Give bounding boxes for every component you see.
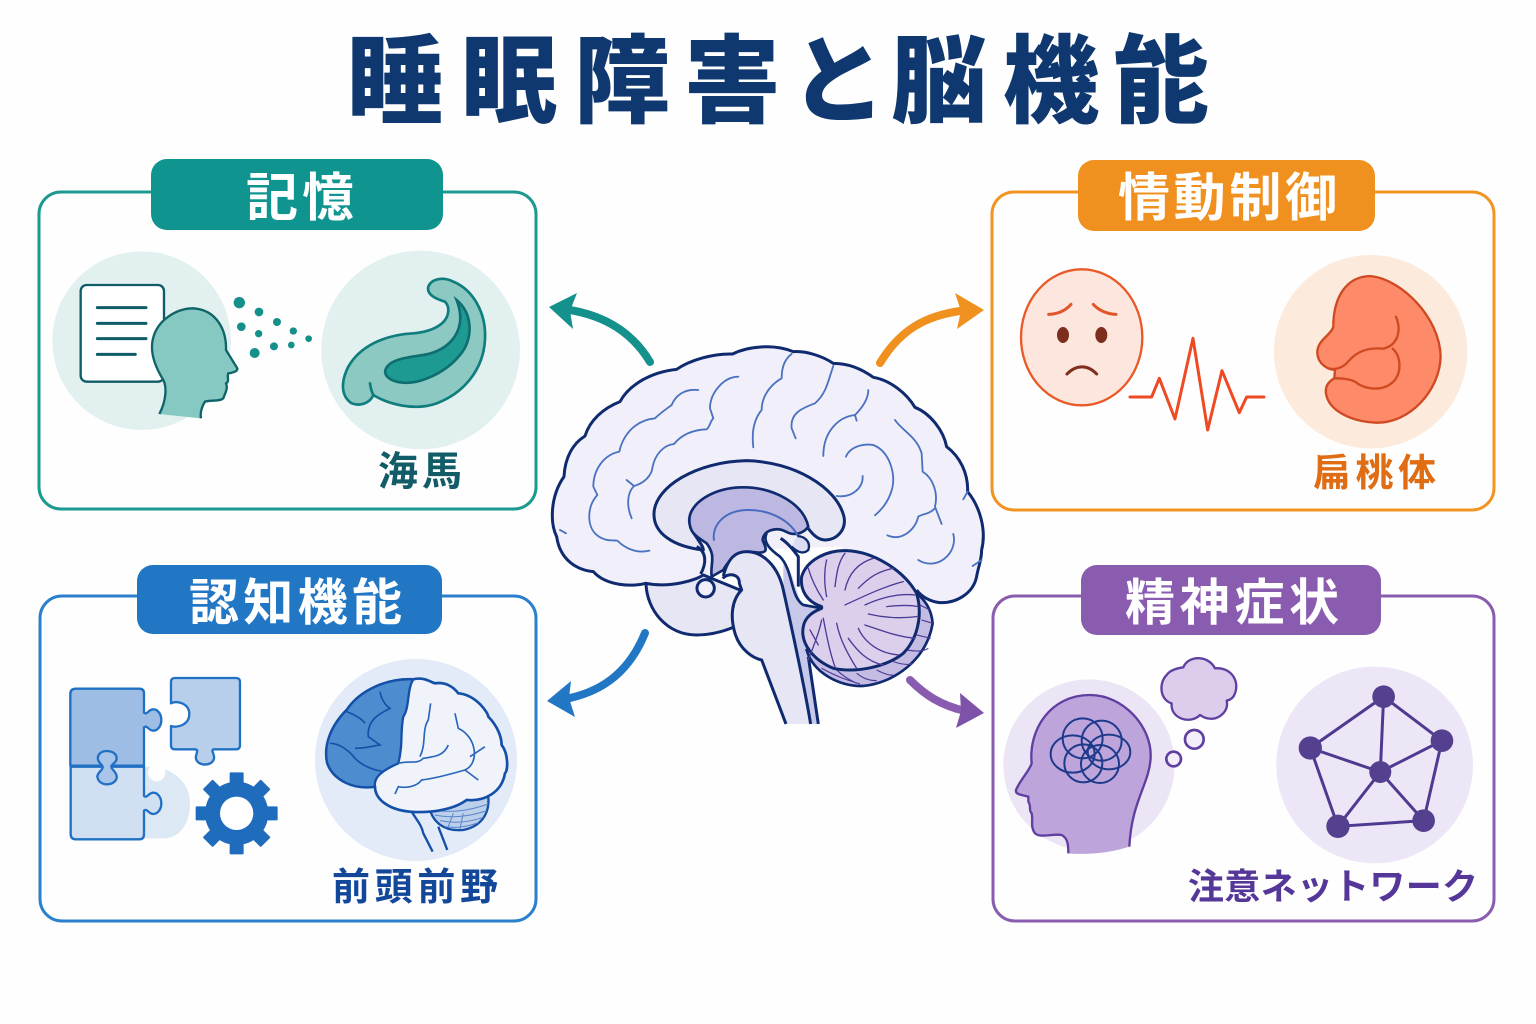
- icon: hippocampus: [321, 251, 520, 449]
- brain stem: [723, 552, 811, 724]
- label: prefrontal cortex: 前頭前野: [332, 867, 498, 909]
- heading tab: psychiatric symptoms: [1081, 565, 1381, 635]
- icon: pulse line: [1130, 338, 1264, 430]
- icon: amygdala: [1274, 255, 1467, 448]
- cerebellum: [801, 551, 933, 686]
- label: attention network: 注意ネットワーク: [1188, 866, 1478, 907]
- icon: gear: [196, 772, 278, 854]
- label: hippocampus: 海馬: [378, 450, 462, 494]
- heading tab: cognitive function: 認知機能: [189, 575, 402, 631]
- icon: head with tangled thoughts: [1003, 679, 1175, 854]
- panel: emotion regulation: [992, 160, 1494, 510]
- temporal lobe: [646, 575, 740, 635]
- corpus callosum: [654, 461, 844, 550]
- heading tab: psychiatric symptoms: 精神症状: [1125, 575, 1339, 631]
- panel: psychiatric symptoms: [993, 565, 1494, 921]
- arrow: to emotion regulation: [880, 293, 984, 363]
- panel: memory: [39, 159, 536, 509]
- central brain illustration: [552, 347, 983, 724]
- arrow: to psychiatric symptoms: [910, 680, 984, 728]
- heading tab: cognitive function: [137, 565, 442, 634]
- heading tab: memory: [151, 159, 443, 230]
- title: 睡眠障害と脳機能: [347, 29, 1209, 136]
- panel: cognitive function: [40, 565, 536, 921]
- cerebrum: [552, 347, 983, 603]
- arrow: to cognitive function: [547, 633, 645, 717]
- icon: thought cloud: [1161, 658, 1236, 766]
- pituitary: [697, 580, 714, 597]
- icon: document, head and dots: [52, 251, 312, 430]
- arrow: to memory: [549, 293, 650, 362]
- heading tab: emotion regulation: 情動制御: [1118, 170, 1337, 228]
- icon: attention network: [1276, 667, 1473, 863]
- icon: brain with prefrontal cortex: [315, 659, 517, 861]
- icon: puzzle pieces: [70, 678, 240, 839]
- label: amygdala: 扁桃体: [1313, 453, 1436, 495]
- heading tab: emotion regulation: [1078, 160, 1375, 231]
- cortical folds: [560, 354, 982, 566]
- thalamus: [689, 487, 808, 577]
- heading tab: memory: 記憶: [246, 170, 354, 228]
- icon: worried face: [1021, 269, 1142, 405]
